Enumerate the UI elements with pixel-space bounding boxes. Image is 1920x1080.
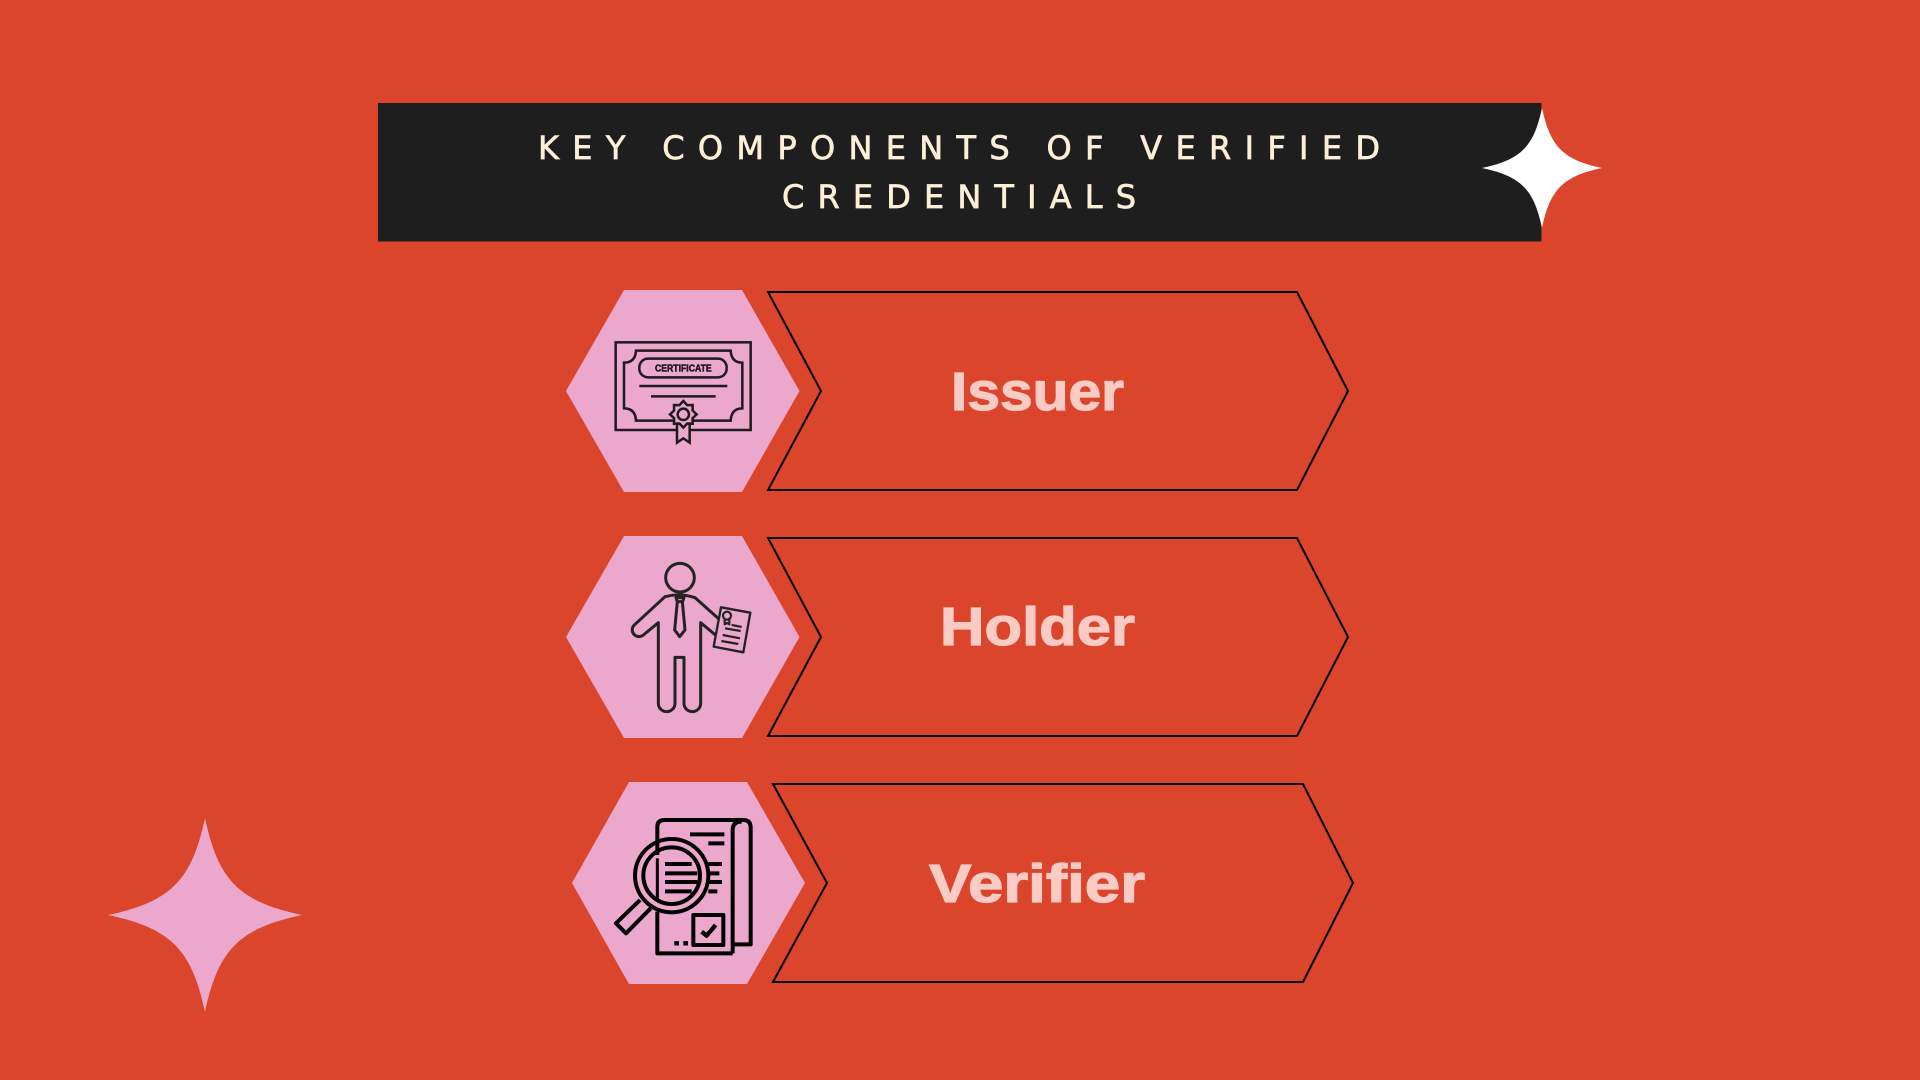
icon: person holding document (632, 563, 750, 712)
hexagon: verifier (572, 782, 805, 984)
hexagon: issuer (566, 290, 800, 492)
title text: CREDENTIALS (782, 178, 1136, 216)
title text (538, 129, 1380, 216)
white sparkle (1482, 108, 1602, 228)
icon: certificate (616, 342, 751, 443)
item: verifier (572, 782, 1353, 984)
icon: certificate: CERTIFICATE (655, 364, 712, 375)
chevron: holder (768, 538, 1348, 736)
label: issuer: Issuer (951, 362, 1124, 422)
label: holder: Holder (940, 597, 1135, 657)
pink sparkle (108, 818, 302, 1012)
label: verifier: Verifier (929, 854, 1145, 914)
title banner (378, 103, 1542, 242)
item: holder (566, 536, 1348, 738)
item: issuer (566, 290, 1348, 492)
hexagon: holder (566, 536, 800, 738)
chevron: issuer (768, 292, 1348, 490)
chevron: verifier (773, 784, 1353, 982)
title text: KEY COMPONENTS OF VERIFIED (538, 129, 1380, 167)
icon: document under magnifying glass (616, 820, 751, 953)
